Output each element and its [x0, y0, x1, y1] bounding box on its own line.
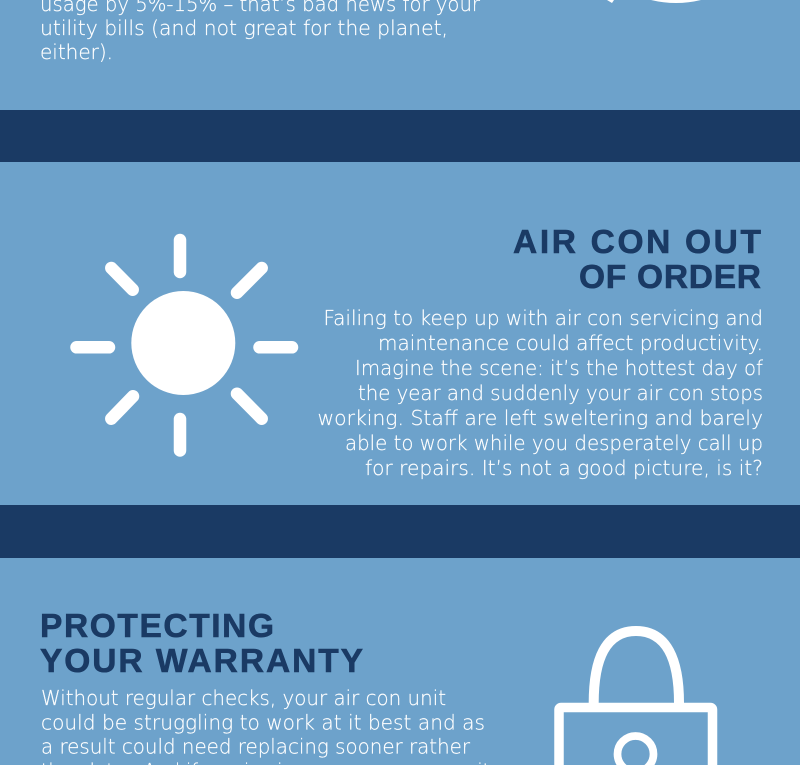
- text block: air con out of order: Failing to keep up with air con servicing and: [324, 306, 763, 330]
- heading: air con out of order: OF ORDER: [579, 259, 761, 296]
- text block: energy usage: either).: [40, 40, 113, 64]
- text block: protecting your warranty: could be struggling to work at it best and as: [41, 710, 485, 734]
- text block: air con out of order: [318, 306, 764, 480]
- icon: sun: [76, 240, 292, 450]
- icon: cropped top icon: [607, 0, 701, 3]
- text block: air con out of order: for repairs. It’s not a good picture, is it?: [365, 456, 763, 480]
- text block: air con out of order: working. Staff are left sweltering and barely: [318, 406, 763, 430]
- heading: air con out of order: AIR CON OUT: [513, 224, 762, 261]
- dark band: lower divider: [0, 505, 800, 558]
- icon: padlock: [559, 631, 712, 765]
- text block: energy usage: [40, 0, 481, 64]
- dark band: upper divider: [0, 110, 800, 162]
- heading: air con out of order: [513, 224, 762, 296]
- text block: protecting your warranty: a result could need replacing sooner rather: [41, 734, 471, 758]
- text block: air con out of order: able to work while you desperately call up: [345, 431, 763, 455]
- text block: air con out of order: Imagine the scene: it’s the hottest day of: [355, 356, 764, 380]
- heading: protecting your warranty: YOUR WARRANTY: [40, 643, 363, 680]
- text block: energy usage: utility bills (and not great for the planet,: [40, 16, 448, 40]
- heading: protecting your warranty: PROTECTING: [40, 608, 274, 645]
- text block: air con out of order: the year and suddenly your air con stops: [358, 381, 763, 405]
- text block: air con out of order: maintenance could affect productivity.: [378, 331, 763, 355]
- text block: protecting your warranty: [41, 686, 490, 765]
- text block: protecting your warranty: Without regular checks, your air con unit: [41, 686, 446, 710]
- heading: protecting your warranty: [40, 608, 363, 680]
